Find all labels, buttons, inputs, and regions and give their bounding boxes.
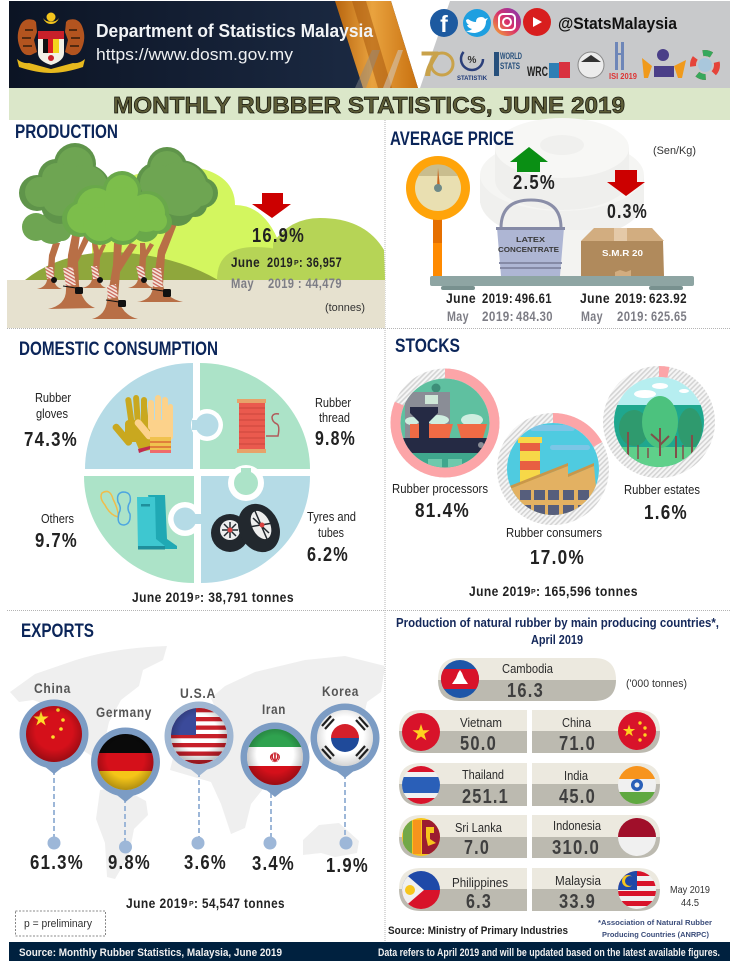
- label: others: 9.7%: [35, 530, 78, 552]
- illustration: hills and ground: [7, 167, 385, 328]
- pin: china: [20, 680, 88, 850]
- illustration: rubber trees: [19, 143, 218, 319]
- icon: scale: [406, 156, 694, 290]
- values: june and may: [231, 254, 342, 291]
- label: rubber consumers: 17.0%: [530, 547, 585, 569]
- values: latex price: 2019:: [482, 308, 514, 324]
- pill: sri lanka: 7.0: [464, 837, 490, 859]
- icon: rubber processors gauge: [396, 374, 494, 472]
- note: malaysia may 2019: May 2019: [670, 885, 710, 896]
- values: smr price: 623.92: [649, 290, 687, 306]
- tree back left small: [22, 212, 71, 289]
- pill: indonesia: 310.0: [552, 837, 600, 859]
- pill: sri lanka: [399, 815, 527, 859]
- percentages: exports: 1.9%: [326, 855, 369, 877]
- tree back middle small: [82, 243, 106, 288]
- event logos: WORLD: [500, 51, 522, 61]
- website url: https://www.dosm.gov.my: [96, 45, 294, 64]
- source: ministry: Source: Ministry of Primary Industries: [388, 925, 568, 937]
- label: rubber thread: Rubber: [315, 395, 352, 410]
- note: malaysia may 2019: [670, 885, 710, 909]
- pill: china: [532, 710, 660, 755]
- heading: country production: [396, 616, 719, 647]
- percentages: exports: 3.6%: [184, 852, 227, 874]
- tree large right: [136, 147, 218, 302]
- values: june and may: 2019 : 44,479: [268, 275, 342, 291]
- arrow: down: [252, 193, 291, 218]
- heading: average price: AVERAGE PRICE: [390, 129, 514, 150]
- footer bar: Source: Monthly Rubber Statistics, Malaysia, June 2019: [19, 947, 282, 959]
- pill: india: India: [564, 768, 589, 783]
- percentages: exports: [30, 852, 369, 877]
- values: latex price: [446, 290, 553, 324]
- pill: thailand: [399, 763, 527, 808]
- panel: natural rubber production by country: [388, 616, 719, 939]
- label: rubber consumers: [506, 525, 602, 569]
- arrow: up: [510, 147, 548, 172]
- label: rubber gloves: [24, 390, 78, 451]
- icon: instagram: [493, 8, 521, 36]
- values: latex price: June: [446, 290, 476, 306]
- pill: philippines: 6.3: [466, 891, 492, 913]
- event logos: STATS: [500, 61, 520, 71]
- world map background: [10, 646, 385, 879]
- icon: latex bucket: LATEX: [516, 235, 545, 244]
- label: rubber processors: 81.4%: [415, 500, 470, 522]
- title band: MONTHLY RUBBER STATISTICS, JUNE 2019: [113, 92, 625, 118]
- label: rubber gloves: gloves: [36, 406, 68, 421]
- values: latex price: 496.61: [515, 290, 552, 306]
- pin: korea: Korea: [322, 683, 359, 699]
- total: domestic consumption: : 38,791 tonnes: [200, 589, 294, 605]
- total: stocks: : 165,596 tonnes: [536, 583, 638, 599]
- label: rubber estates: [624, 482, 700, 524]
- label: rubber gloves: 74.3%: [24, 429, 78, 451]
- label: rubber processors: [392, 481, 488, 522]
- label: rubber estates: Rubber estates: [624, 482, 700, 497]
- pin: korea: [310, 683, 380, 850]
- pill: thailand: Thailand: [462, 767, 504, 782]
- total: exports: P: [189, 901, 194, 908]
- total: stocks: June 2019: [469, 583, 531, 599]
- icon: tyres: [211, 497, 288, 559]
- pill: sri lanka: Sri Lanka: [455, 820, 503, 835]
- label: rubber gloves: Rubber: [35, 390, 72, 405]
- label: tyres and tubes: Tyres and: [307, 509, 356, 524]
- pill: malaysia: [532, 868, 660, 913]
- total: exports: [126, 895, 285, 911]
- event logos: 7: [420, 45, 440, 84]
- icon: facebook: [430, 9, 458, 37]
- percentage: smr change: 0.3%: [607, 201, 648, 223]
- values: latex price: 484.30: [516, 308, 553, 324]
- icon: rubber estates gauge: [608, 372, 710, 472]
- values: smr price: [580, 290, 687, 324]
- event logos: STATISTIK: [457, 76, 488, 82]
- icon: smr 20 box: S.M.R 20: [602, 249, 644, 258]
- panel: average price: [390, 118, 696, 324]
- label: others: Others: [41, 511, 74, 526]
- panel: production: [7, 122, 385, 328]
- icon: youtube: [523, 8, 551, 36]
- percentages: exports: 9.8%: [108, 852, 151, 874]
- label: tyres and tubes: [307, 509, 356, 566]
- label: others: [35, 511, 78, 552]
- values: latex price: May: [447, 308, 469, 324]
- unit: tonnes: (tonnes): [325, 302, 365, 314]
- event logos: WRC: [527, 63, 548, 79]
- total: domestic consumption: June 2019: [132, 589, 194, 605]
- panel: stocks: [392, 336, 710, 599]
- unit: sen per kg: (Sen/Kg): [653, 145, 696, 157]
- tree front: [62, 171, 172, 319]
- pill: vietnam: [399, 710, 527, 755]
- pill: philippines: [399, 868, 527, 913]
- arrow: down: [607, 170, 645, 196]
- pill: indonesia: Indonesia: [553, 818, 602, 833]
- icon: thread spool: [237, 399, 279, 453]
- label: rubber thread: 9.8%: [315, 428, 356, 450]
- pill: china: 71.0: [559, 733, 596, 755]
- values: june and may: June: [231, 254, 260, 270]
- title band: [9, 88, 730, 120]
- pin: usa: [164, 685, 234, 850]
- values: latex price: 2019:: [482, 290, 513, 306]
- label: rubber processors: Rubber processors: [392, 481, 488, 496]
- panel: domestic consumption: [19, 339, 356, 605]
- icon: Malaysian coat of arms: [17, 12, 85, 73]
- pill: cambodia: 16.3: [507, 680, 544, 702]
- label: rubber thread: thread: [319, 410, 350, 425]
- icon: gloves: [111, 395, 173, 453]
- tree large left: [19, 143, 111, 309]
- pin: usa: U.S.A: [180, 685, 216, 701]
- note: preliminary: p = preliminary: [24, 918, 92, 930]
- total: stocks: [469, 583, 638, 599]
- values: smr price: 2019:: [617, 308, 648, 324]
- unit: thousand tonnes: ('000 tonnes): [626, 678, 687, 690]
- pill: india: 45.0: [559, 786, 596, 808]
- heading: stocks: STOCKS: [395, 336, 460, 357]
- heading: country production: April 2019: [531, 633, 583, 647]
- pin: iran: [240, 701, 310, 850]
- pill: malaysia: Malaysia: [555, 873, 602, 888]
- icon: smr 20 box: [581, 228, 664, 276]
- illustration: rubber sheets background: [480, 118, 644, 276]
- note: anrpc: Producing Countries (ANRPC): [602, 930, 709, 939]
- values: smr price: May: [581, 308, 603, 324]
- panel: exports: [10, 621, 385, 936]
- total: stocks: P: [531, 589, 536, 596]
- pin: germany: [91, 704, 160, 854]
- values: june and may: May: [231, 275, 254, 291]
- percentages: exports: 3.4%: [252, 853, 295, 875]
- label: rubber estates: 1.6%: [644, 502, 688, 524]
- pin: iran: Iran: [262, 701, 286, 717]
- values: june and may: P: [294, 260, 299, 267]
- icon: latex bucket: CONCENTRATE: [498, 245, 559, 254]
- icon: facebook: f: [440, 11, 448, 37]
- values: june and may: 2019: [267, 254, 293, 270]
- values: smr price: 2019:: [615, 290, 647, 306]
- social handle: @StatsMalaysia: [558, 14, 677, 33]
- percentages: exports: 61.3%: [30, 852, 84, 874]
- icon: rubber consumers gauge: [502, 418, 604, 530]
- label: rubber thread: [315, 395, 356, 450]
- total: exports: June 2019: [126, 895, 188, 911]
- pill: philippines: Philippines: [452, 875, 508, 890]
- heading: exports: EXPORTS: [21, 621, 94, 642]
- pill: vietnam: 50.0: [460, 733, 497, 755]
- footer bar: [9, 942, 730, 961]
- pill: china: China: [562, 715, 592, 730]
- percentage: latex change: 2.5%: [513, 172, 556, 194]
- event logos: ISI 2019: [609, 72, 638, 81]
- pill: cambodia: [438, 658, 616, 702]
- tree back right small: [128, 243, 154, 288]
- icon: twitter: [463, 9, 491, 37]
- pill: malaysia: 33.9: [559, 891, 596, 913]
- pill: indonesia: [532, 815, 660, 859]
- pill: cambodia: Cambodia: [502, 661, 554, 676]
- total: domestic consumption: [132, 589, 294, 605]
- label: tyres and tubes: tubes: [318, 525, 344, 540]
- header banner: [9, 1, 730, 88]
- note: malaysia may 2019: 44.5: [681, 898, 699, 909]
- pin: iran: ☫: [269, 750, 281, 765]
- values: smr price: 625.65: [651, 308, 687, 324]
- heading: domestic consumption: DOMESTIC CONSUMPTION: [19, 339, 218, 360]
- total: domestic consumption: P: [195, 595, 200, 602]
- event logos: [420, 42, 717, 84]
- department name: Department of Statistics Malaysia: [96, 21, 374, 41]
- note: anrpc: [598, 918, 712, 939]
- icon: latex bucket: [496, 200, 565, 276]
- chart: puzzle pie: [84, 363, 310, 583]
- label: tyres and tubes: 6.2%: [307, 544, 349, 566]
- note: preliminary: [16, 911, 106, 936]
- event logos: %: [468, 55, 477, 66]
- label: rubber consumers: Rubber consumers: [506, 525, 602, 540]
- pin: china: China: [34, 680, 71, 696]
- note: anrpc: *Association of Natural Rubber: [598, 918, 712, 927]
- pill: thailand: 251.1: [462, 786, 509, 808]
- heading: production: PRODUCTION: [15, 122, 118, 143]
- icon: boots and rubber bands: [101, 491, 177, 550]
- values: smr price: June: [580, 290, 610, 306]
- total: exports: : 54,547 tonnes: [194, 895, 285, 911]
- pill: vietnam: Vietnam: [460, 715, 502, 730]
- pill: india: [532, 763, 660, 808]
- values: june and may: : 36,957: [299, 254, 342, 270]
- percentage: production: 16.9%: [252, 225, 305, 247]
- pin: germany: Germany: [96, 704, 152, 720]
